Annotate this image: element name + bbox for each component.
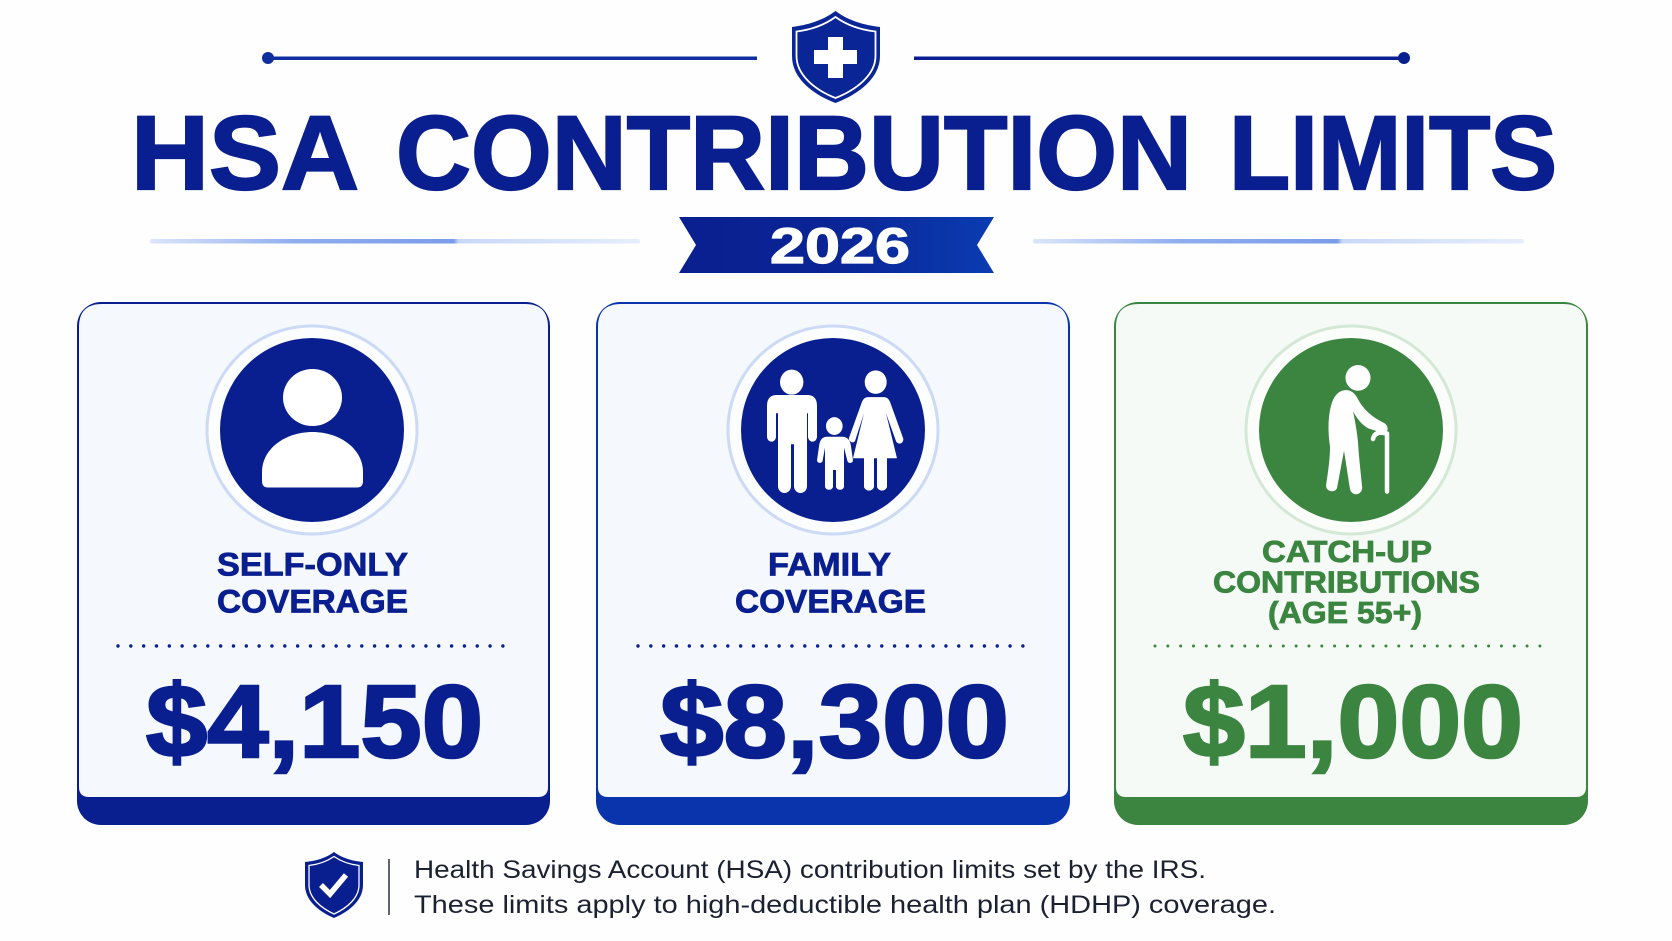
panel: catch-up contributions [1114,302,1588,825]
header ornament line: left [262,52,757,64]
value: $1,000: $1,000 [1183,664,1523,779]
icon: shield with medical cross [792,11,880,103]
value: $4,150: $4,150 [146,664,483,779]
icon: family [728,326,938,534]
label: self-only coverage [217,546,408,620]
decorative rule: right of year [1033,239,1524,244]
value: $8,300: $8,300 [660,664,1009,779]
icon: older adult with cane [1246,326,1456,534]
label: catch-up contributions (age 55+): (AGE 55+) [1268,595,1422,630]
title [131,95,1557,212]
label: family coverage: FAMILY [768,546,891,582]
panel: self-only coverage [77,302,550,825]
title: CONTRIBUTION [396,95,1192,212]
icon: single person [207,326,417,534]
label: catch-up contributions (age 55+): CONTRIBUTIONS [1213,564,1480,600]
label: catch-up contributions (age 55+): CATCH-UP [1262,534,1432,569]
panel: family coverage [596,302,1070,825]
label: family coverage: COVERAGE [735,584,926,620]
year ribbon banner: 2026 [770,218,910,274]
footnote text: Health Savings Account (HSA) contribution limits set by the IRS. [414,856,1206,884]
header ornament line: right [914,52,1410,64]
decorative rule: left of year [150,239,640,244]
footnote text [414,856,1276,919]
title: HSA [131,95,359,212]
year ribbon banner [679,217,994,274]
title: LIMITS [1229,95,1557,212]
label: self-only coverage: COVERAGE [217,584,408,620]
footnote text: These limits apply to high-deductible health plan (HDHP) coverage. [414,891,1276,919]
label: self-only coverage: SELF-ONLY [217,546,408,582]
label: family coverage [735,546,926,620]
label: catch-up contributions (age 55+) [1213,534,1480,630]
icon: shield with check mark [305,852,363,918]
